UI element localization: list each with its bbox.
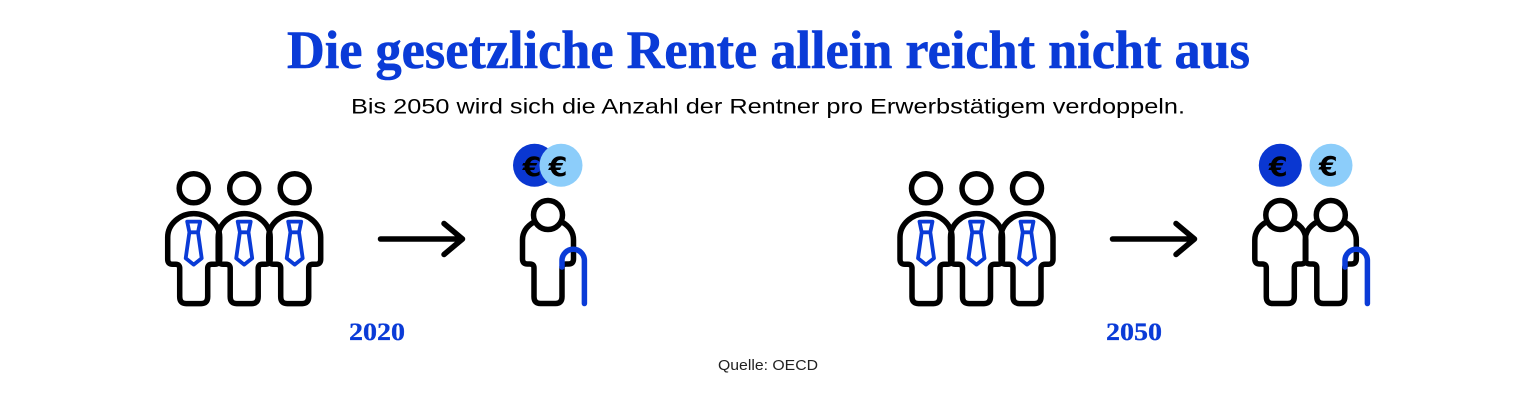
icon: retiree with cane 2020 bbox=[522, 200, 584, 304]
panel: 2050 bbox=[900, 144, 1367, 346]
icon: two separate euro coins 2050: € bbox=[1318, 152, 1338, 182]
panel: 2020 bbox=[168, 144, 584, 346]
year label 2050: 2050 bbox=[1106, 319, 1162, 346]
icon: three workers 2050 bbox=[900, 174, 1053, 304]
icon: two overlapping euro coins 2020: € bbox=[548, 152, 567, 183]
icon: two separate euro coins 2050: € bbox=[1268, 152, 1288, 183]
icon: two overlapping euro coins 2020 bbox=[513, 144, 582, 187]
icon: two separate euro coins 2050 bbox=[1259, 144, 1352, 187]
icon: two retirees with cane 2050 bbox=[1255, 200, 1367, 304]
icon: three workers 2020 bbox=[168, 174, 321, 304]
year label 2020: 2020 bbox=[349, 319, 405, 346]
subtitle: Bis 2050 wird sich die Anzahl der Rentner pro Erwerbstätigem verdoppeln. bbox=[351, 94, 1185, 118]
icon: two overlapping euro coins 2020: € bbox=[522, 152, 541, 183]
arrow 2050 bbox=[1112, 224, 1194, 254]
title: Die gesetzliche Rente allein reicht nicht aus bbox=[287, 20, 1250, 80]
source note: Quelle: OECD bbox=[718, 357, 818, 374]
arrow 2020 bbox=[380, 224, 462, 254]
